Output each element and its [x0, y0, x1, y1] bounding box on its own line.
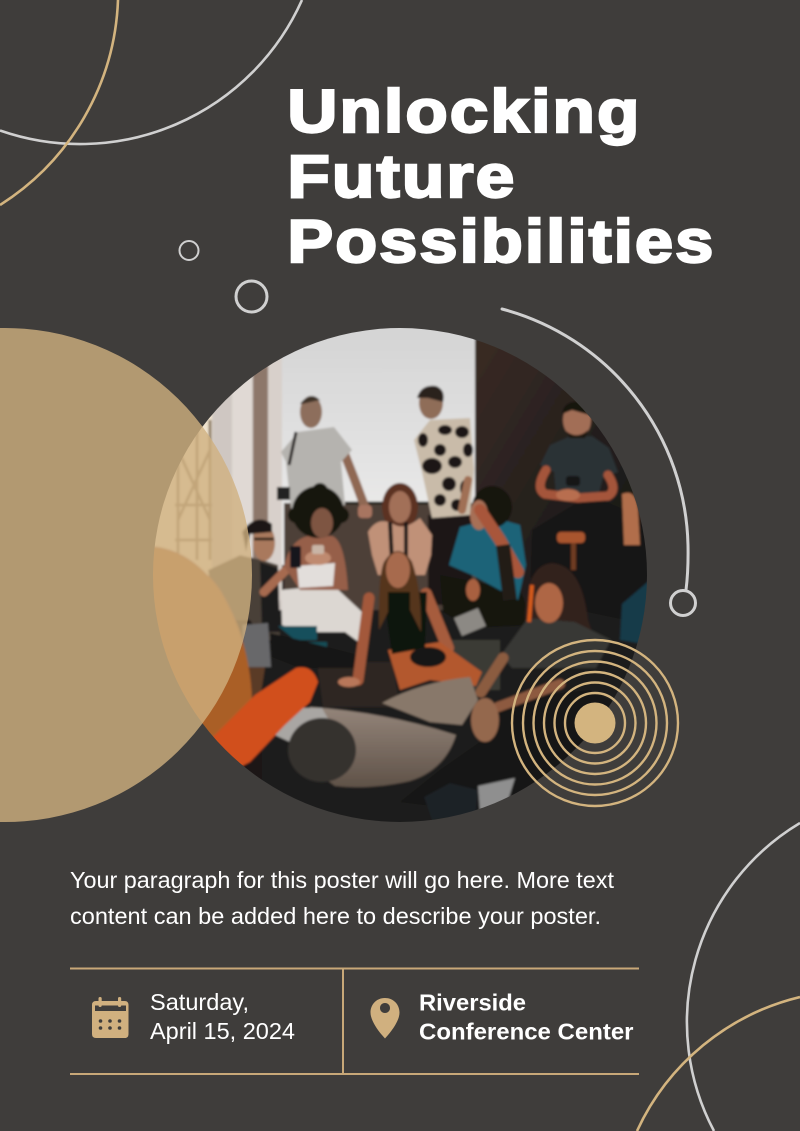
arc line with ring terminal	[502, 309, 696, 616]
translucent beige circle	[0, 328, 252, 822]
location text: Conference Center	[419, 1018, 634, 1044]
standing man left	[277, 396, 372, 518]
small ring	[180, 241, 198, 260]
location text: Riverside	[419, 990, 526, 1016]
foreground dark head	[288, 718, 356, 782]
small pillow	[382, 677, 478, 725]
floor	[372, 609, 521, 648]
seated man right with dark tee	[530, 402, 650, 645]
front center woman	[338, 551, 482, 690]
couch back	[284, 503, 476, 613]
blurred foreground shoulder under overlay	[153, 546, 254, 738]
paragraph	[70, 867, 614, 929]
dark wall	[474, 340, 596, 603]
large pillow	[300, 707, 456, 787]
seated man left	[208, 518, 290, 697]
right front woman	[426, 562, 611, 819]
curly haired woman in white	[270, 483, 362, 668]
date text: Saturday,	[150, 989, 249, 1015]
medium ring	[236, 281, 267, 312]
paragraph: content can be added here to describe your poster.	[70, 903, 601, 929]
scaffold behind overlay	[154, 414, 212, 568]
title: Future	[288, 143, 516, 210]
pale cushion highlight	[275, 708, 330, 742]
curtains	[210, 358, 284, 612]
orange blurred arm	[213, 665, 320, 767]
icon: calendar	[92, 997, 128, 1038]
blue jacket woman	[440, 486, 535, 636]
decorative arc: grey top left	[0, 0, 302, 144]
standing man floral shirt	[414, 386, 474, 605]
location text	[419, 990, 634, 1044]
concentric target	[512, 640, 678, 806]
icon: location pin	[370, 998, 400, 1038]
decorative arc: gold top left	[0, 0, 118, 205]
decorative arc: gold bottom right	[637, 997, 800, 1131]
date text: April 15, 2024	[150, 1018, 295, 1044]
title: Possibilities	[288, 208, 716, 275]
window	[278, 325, 476, 565]
back center woman	[368, 483, 432, 575]
date text	[150, 989, 295, 1044]
decorative arc: grey bottom right	[687, 823, 800, 1131]
title	[288, 78, 716, 275]
info bar frame	[70, 968, 639, 1074]
paragraph: Your paragraph for this poster will go here. More text	[70, 867, 614, 893]
photo: group of young people seated on the floor in a circle crop	[150, 325, 650, 830]
title: Unlocking	[288, 78, 642, 145]
